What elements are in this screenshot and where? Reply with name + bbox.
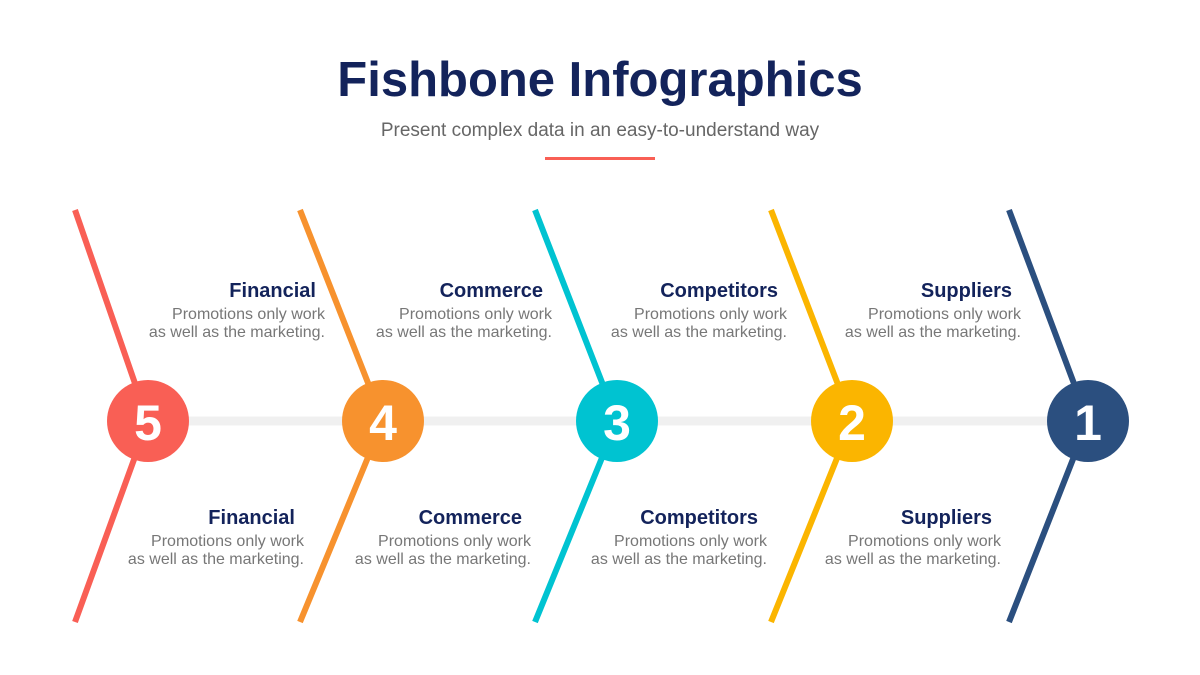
text: competitors bottom: as well as the marketing. — [591, 551, 767, 568]
text: financial top — [149, 280, 325, 341]
text: commerce top — [376, 280, 552, 341]
text: competitors bottom: Promotions only work — [614, 533, 767, 550]
accent line — [545, 157, 655, 160]
bone 3: 3 — [603, 395, 631, 451]
text: financial bottom: as well as the marketing. — [128, 551, 304, 568]
text: suppliers bottom: Promotions only work — [848, 533, 1001, 550]
bone 2: 2 — [838, 395, 866, 451]
text: commerce top: as well as the marketing. — [376, 324, 552, 341]
text: competitors bottom — [591, 507, 767, 568]
bone 1 — [1009, 210, 1129, 622]
text: commerce bottom: as well as the marketing. — [355, 551, 531, 568]
text: commerce bottom: Promotions only work — [378, 533, 531, 550]
bone 1: 1 — [1074, 395, 1102, 451]
text: financial top: Promotions only work — [172, 306, 325, 323]
bone 4 — [300, 210, 424, 622]
text: suppliers top: Suppliers — [921, 280, 1012, 302]
bone 2 — [771, 210, 893, 622]
subtitle: Present complex data in an easy-to-understand way — [381, 120, 819, 141]
text: suppliers bottom — [825, 507, 1001, 568]
text: financial top: as well as the marketing. — [149, 324, 325, 341]
text: financial bottom: Financial — [208, 507, 295, 529]
text: suppliers top — [845, 280, 1021, 341]
title: Fishbone Infographics — [337, 53, 863, 107]
bone 4: 4 — [369, 395, 397, 451]
text: commerce bottom — [355, 507, 531, 568]
bone 5: 5 — [134, 395, 162, 451]
text: competitors bottom: Competitors — [640, 507, 758, 529]
bone 5 — [75, 210, 189, 622]
bone 3 — [535, 210, 658, 622]
text: financial bottom: Promotions only work — [151, 533, 304, 550]
text: suppliers bottom: as well as the marketing. — [825, 551, 1001, 568]
text: suppliers bottom: Suppliers — [901, 507, 992, 529]
text: suppliers top: as well as the marketing. — [845, 324, 1021, 341]
text: commerce top: Promotions only work — [399, 306, 552, 323]
text: financial bottom — [128, 507, 304, 568]
text: competitors top: Promotions only work — [634, 306, 787, 323]
text: competitors top: as well as the marketing. — [611, 324, 787, 341]
text: financial top: Financial — [229, 280, 316, 302]
text: commerce top: Commerce — [440, 280, 543, 302]
text: commerce bottom: Commerce — [419, 507, 522, 529]
text: suppliers top: Promotions only work — [868, 306, 1021, 323]
text: competitors top — [611, 280, 787, 341]
text: competitors top: Competitors — [660, 280, 778, 302]
